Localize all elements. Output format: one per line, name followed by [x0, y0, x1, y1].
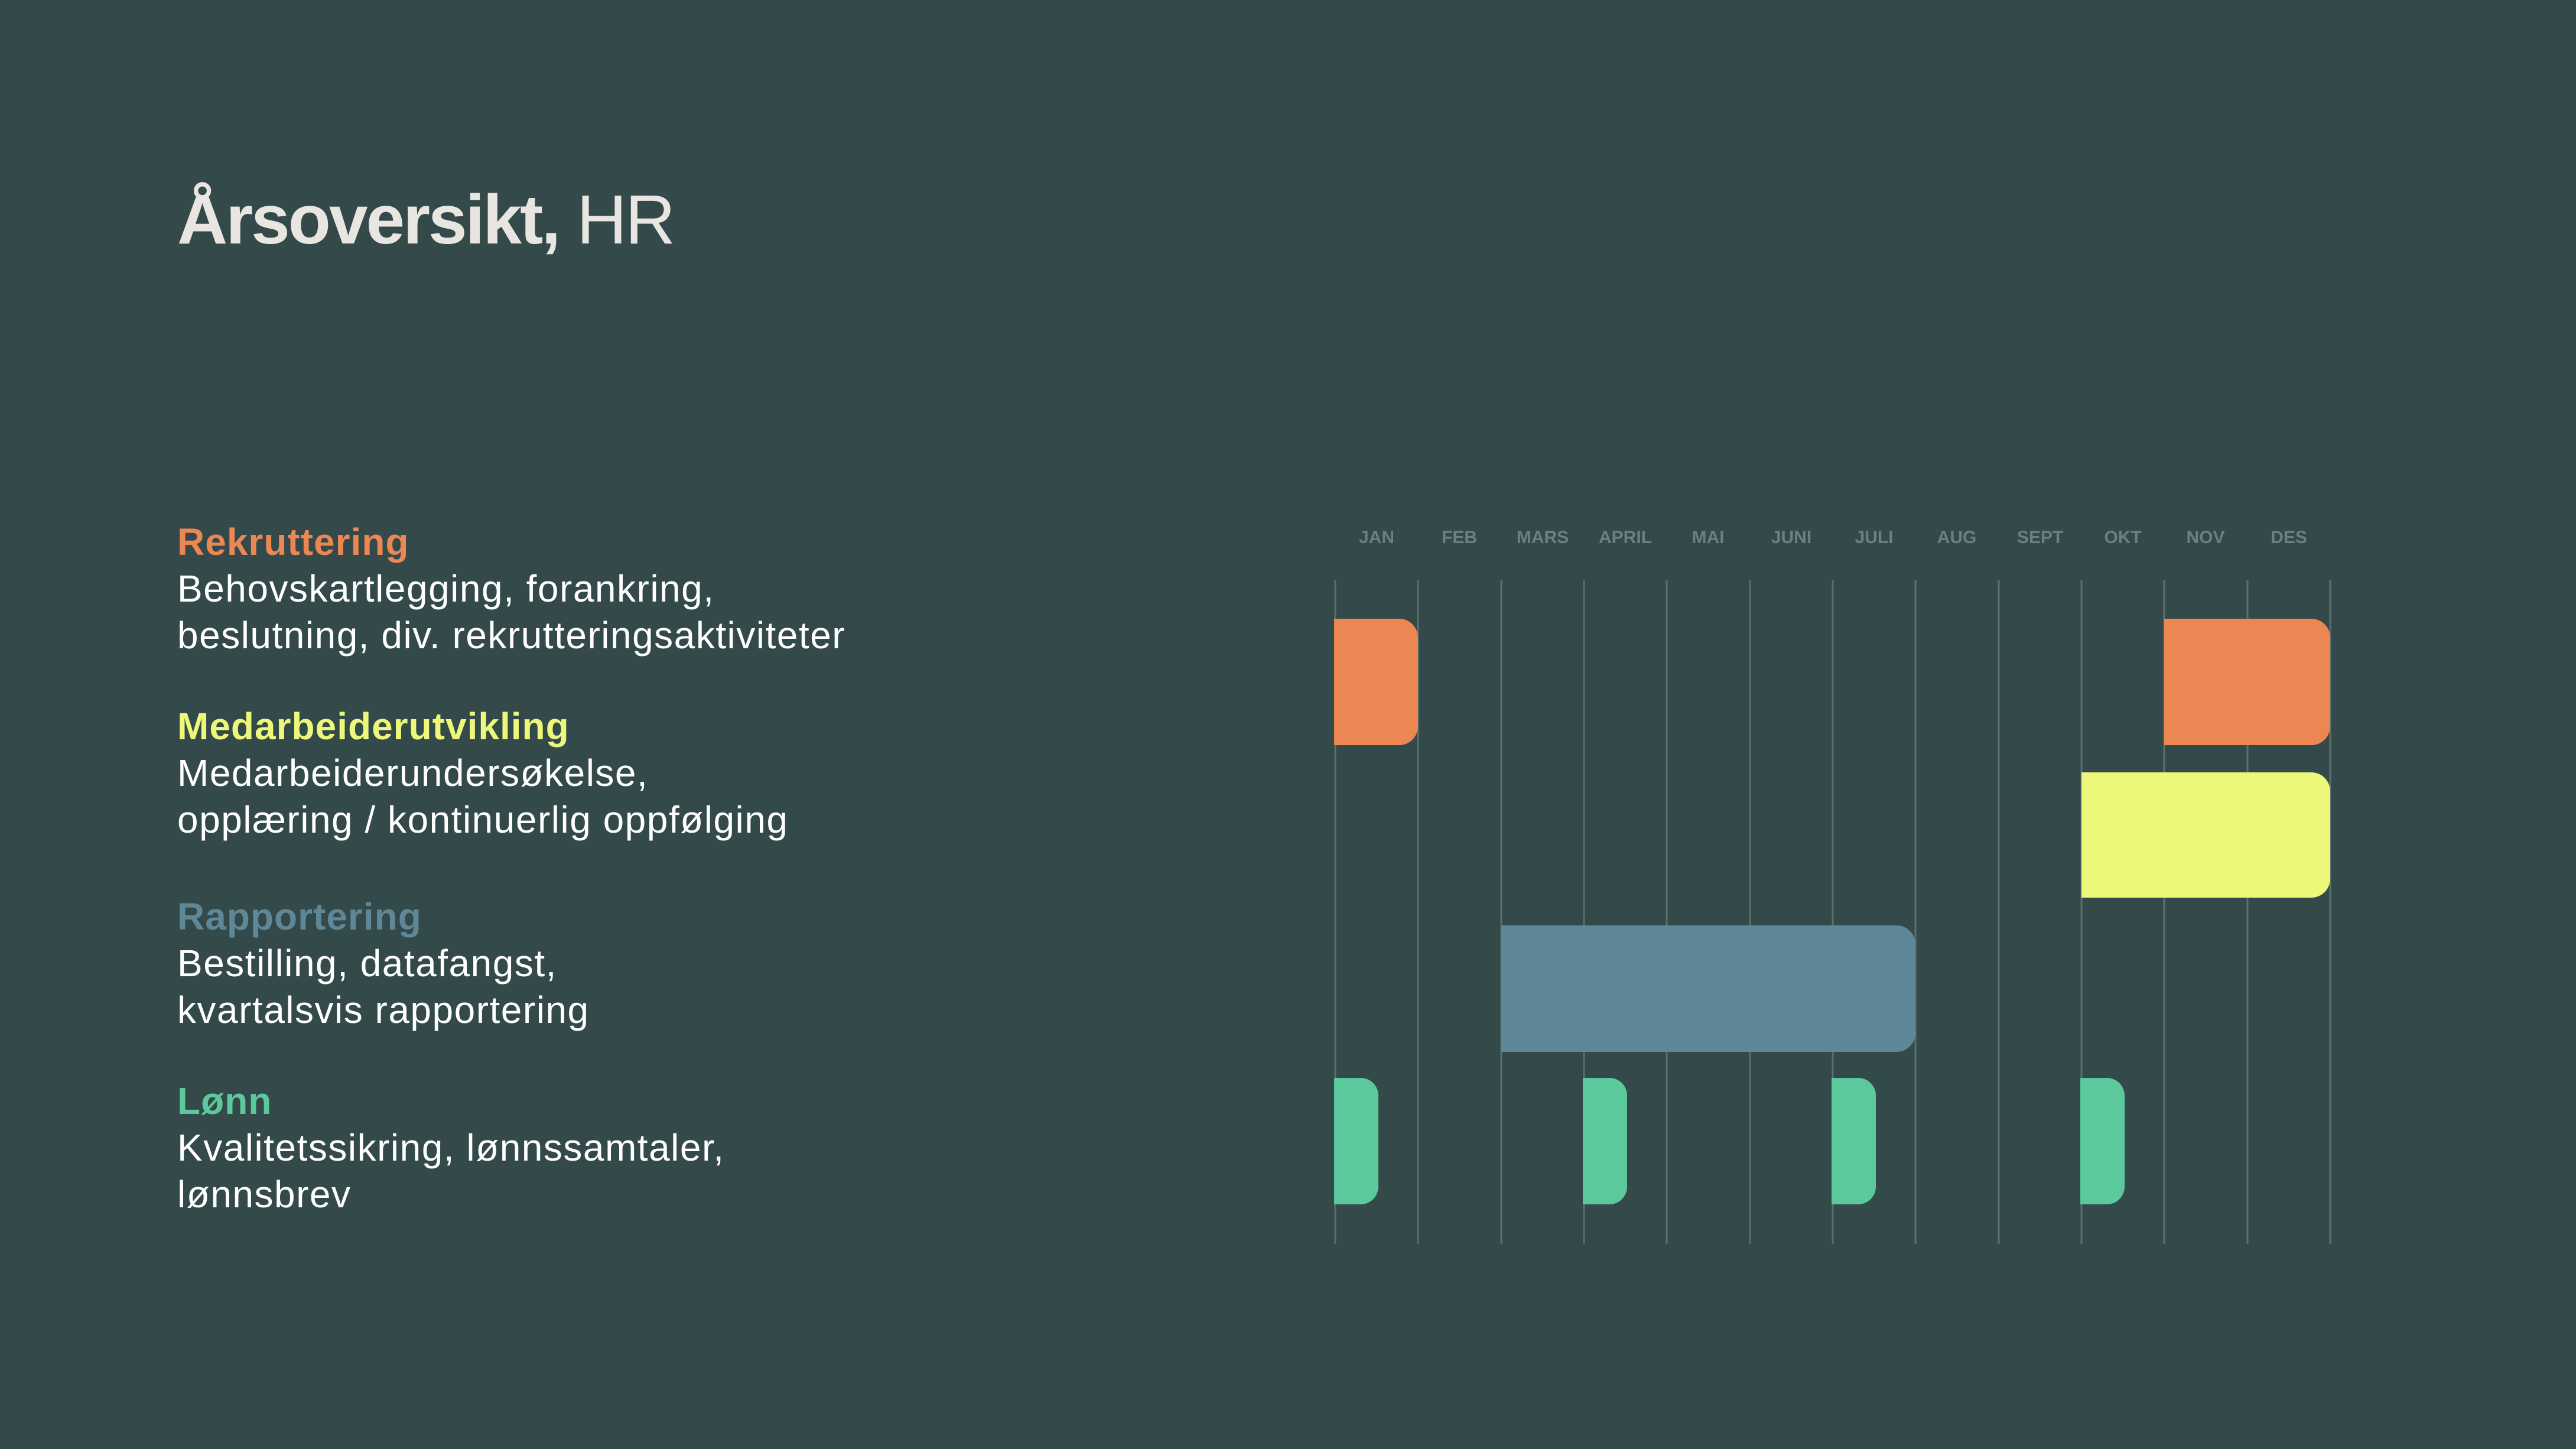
text: Medarbeiderutvikling description	[177, 752, 788, 841]
month labels: APRIL	[1599, 528, 1652, 547]
month labels: FEB	[1442, 528, 1477, 547]
text: Lønn description: Kvalitetssikring, lønnssamtaler,	[177, 1126, 725, 1169]
month labels: NOV	[2186, 528, 2225, 547]
text: Lønn description: lønnsbrev	[177, 1173, 351, 1216]
bars: Rekruttering	[1334, 619, 2330, 745]
text: Rapportering description	[177, 942, 590, 1031]
month labels: MAI	[1692, 528, 1724, 547]
heading: Rapportering: Rapportering	[177, 895, 422, 938]
heading: Lønn: Lønn	[177, 1080, 272, 1122]
text: Rekruttering description: Behovskartlegging, forankring,	[177, 567, 715, 610]
text: Medarbeiderutvikling description: opplæring / kontinuerlig oppfølging	[177, 798, 788, 841]
bar: Rapportering	[1501, 925, 1915, 1052]
bars: Lønn	[1334, 1078, 2125, 1204]
text: Rapportering description: Bestilling, datafangst,	[177, 942, 557, 985]
text: Medarbeiderutvikling description: Medarbeiderundersøkelse,	[177, 752, 648, 794]
month labels: JUNI	[1771, 528, 1811, 547]
bar: Medarbeiderutvikling	[2081, 772, 2330, 898]
month labels: JAN	[1359, 528, 1394, 547]
title: Årsoversikt, HR	[177, 181, 674, 259]
month labels: SEPT	[2017, 528, 2063, 547]
text: Lønn description	[177, 1126, 725, 1216]
month labels: AUG	[1937, 528, 1976, 547]
legend: Rapportering	[177, 895, 590, 1031]
month labels	[1359, 528, 2307, 547]
legend: Rekruttering	[177, 521, 845, 657]
heading: Rekruttering: Rekruttering	[177, 521, 409, 563]
text: Rapportering description: kvartalsvis rapportering	[177, 989, 590, 1031]
month labels: MARS	[1517, 528, 1569, 547]
text: Rekruttering description: beslutning, div. rekrutteringsaktiviteter	[177, 614, 845, 657]
month labels: DES	[2271, 528, 2307, 547]
legend: Lønn	[177, 1080, 725, 1216]
text: Rekruttering description	[177, 567, 845, 657]
legend: Medarbeiderutvikling	[177, 705, 788, 841]
month labels: JULI	[1855, 528, 1894, 547]
heading: Medarbeiderutvikling: Medarbeiderutvikling	[177, 705, 570, 748]
month labels: OKT	[2104, 528, 2142, 547]
